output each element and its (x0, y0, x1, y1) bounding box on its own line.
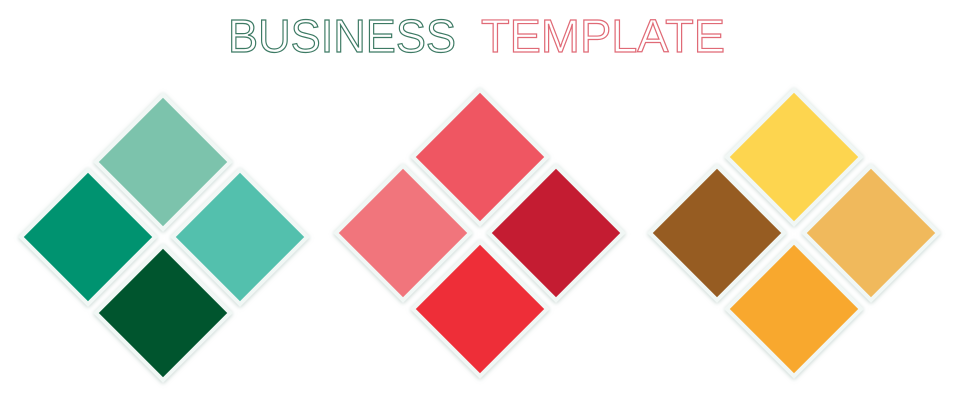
tile: tan right (804, 166, 938, 300)
panel: red cluster (336, 90, 623, 376)
title: template: TEMPLATE (481, 10, 725, 62)
tile: green bottom (96, 246, 230, 380)
tile: red bottom (413, 242, 547, 376)
tile: yellow top (727, 90, 861, 224)
title: business: BUSINESS (228, 10, 456, 62)
title (228, 10, 725, 62)
panel: yellow cluster (650, 90, 938, 376)
tile: orange bottom (727, 242, 861, 376)
tile: brown left (650, 166, 784, 300)
tile: green left (21, 170, 155, 304)
panel: green cluster (21, 95, 307, 380)
tile: red left (336, 166, 470, 300)
tile: red top (413, 90, 547, 224)
tile: green right (173, 170, 307, 304)
tile: red right (489, 166, 623, 300)
tile: green top (96, 95, 230, 229)
